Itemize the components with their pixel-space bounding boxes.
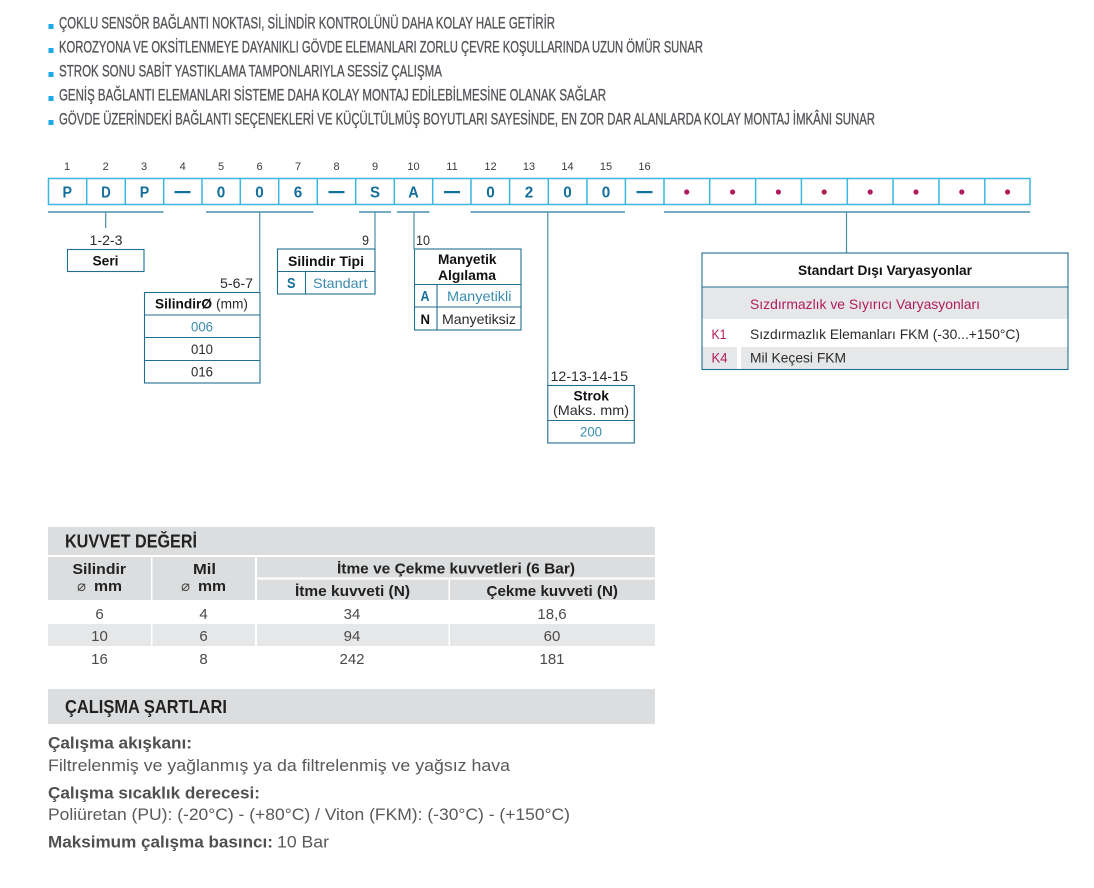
position numbers: 7 [295, 161, 301, 173]
order code strip: 6 [294, 184, 302, 202]
force table: ⌀ [181, 577, 190, 595]
force table: 181 [539, 651, 565, 668]
magnetic sensing box: Manyetik [438, 251, 497, 267]
series box: Seri [92, 252, 118, 268]
operating conditions text [48, 734, 570, 852]
stroke box: (Maks. mm) [553, 402, 629, 418]
operating conditions text: Poliüretan (PU): (-20°C) - (+80°C) / Viton (FKM): (-30°C) - (+150°C) [48, 805, 570, 824]
force table: Silindir [72, 561, 126, 578]
non-standard variations panel: Mil Keçesi FKM [750, 350, 846, 366]
cylinder type box: Standart [313, 275, 368, 291]
position numbers [64, 161, 651, 173]
force table: 242 [339, 651, 365, 668]
stroke box: 200 [580, 424, 602, 440]
feature list: KOROZYONA VE OKSİTLENMEYE DAYANIKLI GÖVDE ELEMANLARI ZORLU ÇEVRE KOŞULLARINDA UZUN ÖMÜR SUNAR [59, 38, 703, 56]
position numbers: 6 [256, 161, 263, 173]
position numbers: 3 [141, 161, 147, 173]
force table [48, 527, 655, 668]
non-standard variations panel: Sızdırmazlık ve Sıyırıcı Varyasyonları [750, 296, 980, 312]
order code strip: A [408, 184, 419, 202]
order code strip: S [370, 184, 380, 202]
cylinder diameter box: 5-6-7 [220, 275, 253, 291]
force table: Çekme kuvveti (N) [486, 583, 618, 600]
position numbers: 8 [333, 161, 340, 173]
non-standard variations panel: K1 [712, 326, 727, 342]
order code strip: P [63, 184, 72, 202]
order code strip: 0 [563, 184, 572, 202]
force table: 6 [95, 606, 104, 623]
order code strip: 2 [525, 184, 533, 202]
cylinder type box: 9 [362, 232, 369, 248]
feature list: ÇOKLU SENSÖR BAĞLANTI NOKTASI, SİLİNDİR KONTROLÜNÜ DAHA KOLAY HALE GETİRİR [59, 14, 555, 32]
magnetic sensing box: N [420, 311, 430, 327]
force table: 4 [199, 606, 208, 623]
order code strip: 0 [602, 184, 610, 202]
operating conditions heading [48, 689, 655, 724]
cylinder type box: S [287, 276, 296, 292]
magnetic sensing box: Algılama [438, 267, 496, 283]
operating conditions text: 10 Bar [277, 832, 329, 852]
series box [68, 232, 144, 272]
operating conditions text: Çalışma akışkanı: [48, 734, 192, 752]
force table: 18,6 [537, 606, 567, 623]
magnetic sensing box [414, 232, 521, 330]
operating conditions text: Filtrelenmiş ve yağlanmış ya da filtrelenmiş ve yağsız hava [48, 756, 511, 775]
position numbers: 5 [218, 161, 224, 173]
magnetic sensing box: Manyetiksiz [442, 311, 516, 327]
position numbers: 1 [64, 161, 70, 173]
non-standard variations panel [702, 253, 1068, 370]
force table: Mil [193, 561, 216, 578]
cylinder diameter box: (mm) [216, 296, 248, 312]
force table: 10 [91, 628, 108, 645]
force table: 34 [344, 606, 360, 623]
position numbers: 15 [600, 161, 612, 173]
cylinder diameter box: 010 [191, 341, 213, 357]
non-standard variations panel: K4 [712, 350, 728, 366]
force table: 8 [199, 651, 208, 668]
stroke box: Strok [574, 388, 609, 404]
position numbers: 14 [561, 161, 574, 173]
magnetic sensing box: Manyetikli [447, 288, 512, 304]
operating conditions heading: ÇALIŞMA ŞARTLARI [65, 697, 227, 717]
order code strip: 0 [217, 184, 225, 202]
cylinder type box: Silindir Tipi [288, 253, 364, 269]
operating conditions text: Çalışma sıcaklık derecesi: [48, 784, 260, 802]
position numbers: 4 [180, 161, 186, 173]
force table: KUVVET DEĞERİ [65, 530, 197, 552]
cylinder diameter box: 016 [191, 364, 213, 380]
cylinder diameter box [144, 275, 260, 383]
force table: 94 [344, 628, 360, 645]
non-standard variations panel: Sızdırmazlık Elemanları FKM (-30...+150°C) [750, 326, 1020, 342]
position numbers: 11 [446, 161, 458, 173]
force table: mm [198, 578, 226, 595]
magnetic sensing box: 10 [416, 232, 430, 248]
force table: 60 [544, 628, 560, 645]
cylinder diameter box: 006 [191, 318, 213, 334]
connector lines [48, 212, 1030, 386]
position numbers: 13 [523, 161, 535, 173]
position numbers: 16 [638, 161, 651, 173]
position numbers: 2 [103, 161, 109, 173]
feature list [48, 14, 875, 128]
series box: 1-2-3 [90, 232, 123, 248]
non-standard variations panel: Standart Dışı Varyasyonlar [798, 262, 973, 278]
order code strip [48, 178, 1030, 204]
operating conditions text: Maksimum çalışma basıncı: [48, 832, 273, 852]
feature list: STROK SONU SABİT YASTIKLAMA TAMPONLARIYLA SESSİZ ÇALIŞMA [59, 62, 442, 80]
cylinder type box [278, 232, 375, 294]
force table: İtme kuvveti (N) [295, 583, 410, 600]
cylinder diameter box: SilindirØ [155, 296, 212, 312]
force table: 6 [199, 628, 208, 645]
feature list: GENİŞ BAĞLANTI ELEMANLARI SİSTEME DAHA KOLAY MONTAJ EDİLEBİLMESİNE OLANAK SAĞLAR [59, 86, 606, 104]
order code strip: P [140, 184, 150, 202]
force table: İtme ve Çekme kuvvetleri (6 Bar) [337, 560, 575, 578]
position numbers: 10 [407, 161, 420, 173]
order code strip: 0 [255, 184, 264, 202]
magnetic sensing box: A [420, 289, 430, 305]
force table: 16 [91, 651, 108, 668]
order code strip: D [101, 184, 111, 202]
stroke box [548, 368, 634, 443]
order code strip: 0 [486, 184, 495, 202]
force table: ⌀ [77, 577, 86, 595]
force table: mm [94, 578, 122, 595]
stroke box: 12-13-14-15 [550, 368, 628, 384]
position numbers: 9 [372, 161, 378, 173]
position numbers: 12 [484, 161, 497, 173]
